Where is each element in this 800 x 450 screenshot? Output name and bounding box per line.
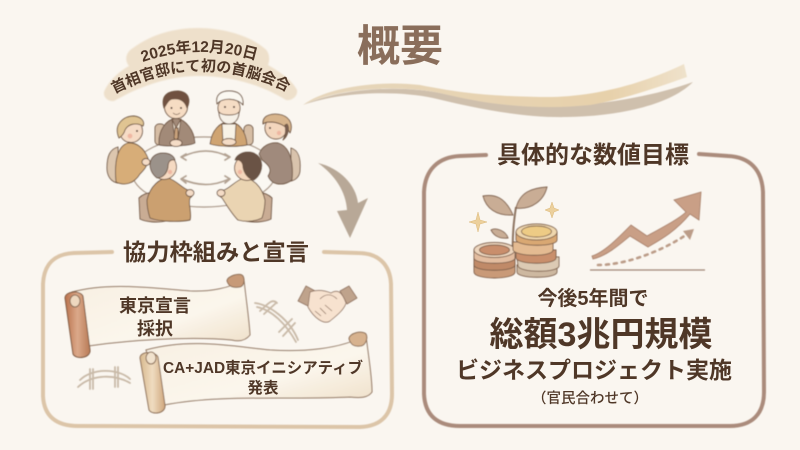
- panel: numeric targets: [424, 142, 764, 426]
- scroll: Tokyo declaration: [65, 274, 250, 357]
- banner date text: 2025年12月20日: [140, 40, 257, 62]
- target text: （官民合わせて）: [532, 390, 648, 407]
- coin stack right: [513, 224, 559, 277]
- icon: growth arrow: [590, 192, 705, 270]
- person: top left: [155, 91, 195, 146]
- person: front left: [139, 153, 194, 222]
- icon: handshake: [298, 286, 357, 322]
- banner location text: 首相官邸にて初の首脳会合: [110, 58, 290, 94]
- date banner: [104, 28, 298, 102]
- coin stack left: [474, 242, 515, 278]
- target text: 総額3兆円規模: [490, 316, 712, 354]
- panel heading: 具体的な数値目標: [497, 142, 689, 169]
- icon: bridge lower: [78, 367, 130, 389]
- panel: cooperation framework: [43, 239, 392, 427]
- person: right: [259, 114, 300, 184]
- scroll text: CA+JAD initiative: CA+JAD東京イニシアティブ: [163, 358, 363, 377]
- scroll text: Tokyo declaration: 東京宣言: [119, 296, 191, 316]
- title swoosh: [303, 64, 693, 117]
- panel border: [424, 154, 764, 426]
- icon: sparkles: [469, 202, 559, 232]
- scroll: CA+JAD initiative: [140, 332, 372, 413]
- baseline: [590, 269, 705, 271]
- circular arrows: [181, 151, 230, 184]
- panel border: [43, 252, 392, 427]
- panel: cooperation framework: 発表: [247, 379, 279, 397]
- dotted trend: [598, 235, 686, 265]
- target text: 今後5年間で: [537, 287, 649, 310]
- person: left: [107, 116, 150, 184]
- title: 概要: [357, 23, 443, 71]
- target text: ビジネスプロジェクト実施: [456, 357, 732, 383]
- illustration: leaders around table: [107, 91, 300, 222]
- panel heading: 協力枠組みと宣言: [123, 239, 309, 265]
- curved arrow: [318, 163, 368, 238]
- person: front right: [217, 152, 272, 222]
- table: [132, 137, 276, 207]
- target text: [456, 287, 732, 407]
- icon: coins and sprout: [474, 187, 559, 278]
- panel: cooperation framework: 採択: [137, 319, 173, 339]
- icon: bridge upper: [255, 301, 298, 342]
- person: white turban: [210, 91, 253, 146]
